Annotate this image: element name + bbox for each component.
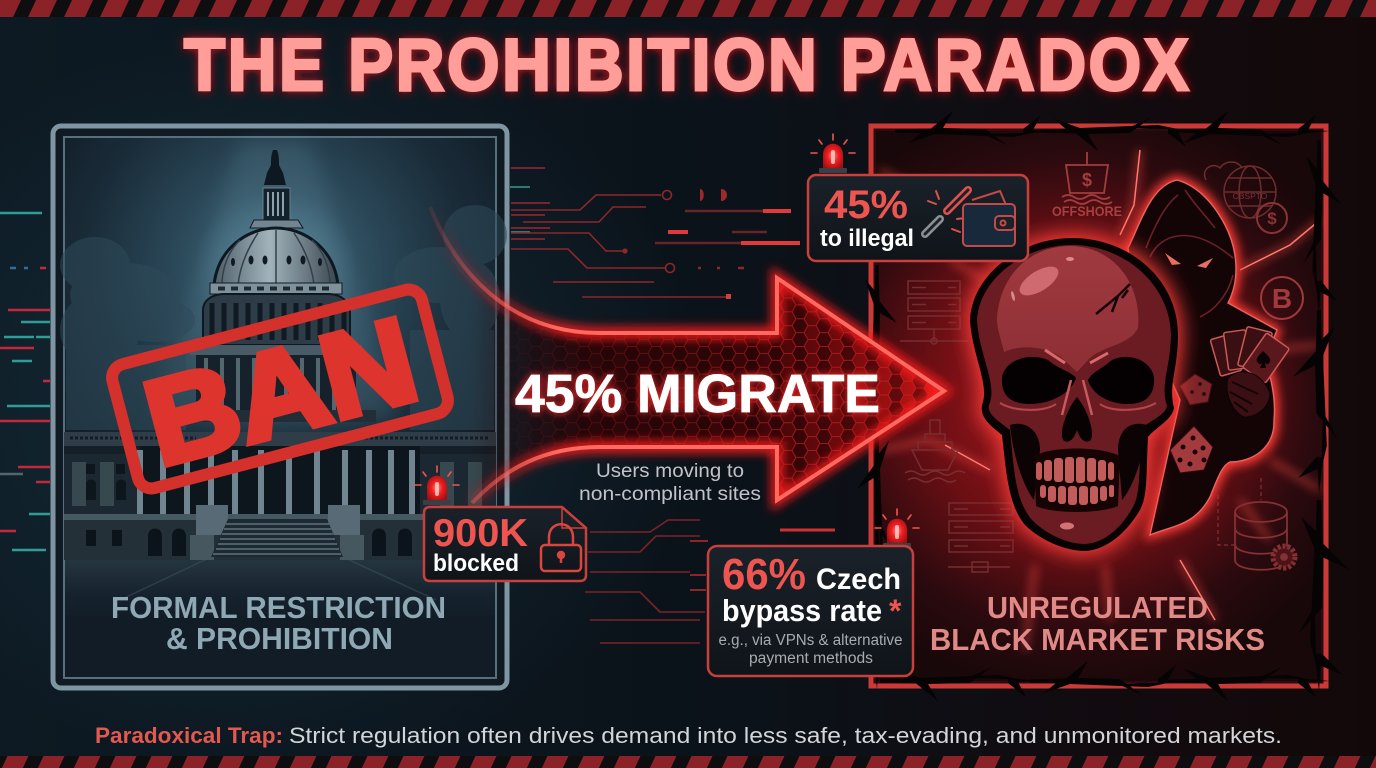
hand [1227, 372, 1270, 417]
icon: dice large [1170, 426, 1213, 473]
thorn vines [857, 111, 1349, 701]
BAN stamp: BAN [132, 293, 429, 491]
glowing cracks [880, 150, 1320, 650]
hazard stripe: top [0, 0, 1376, 17]
label: formal restriction: FORMAL RESTRICTION [111, 590, 446, 625]
panel: unregulated black market [857, 111, 1349, 701]
icon: offshore ship [1052, 152, 1122, 219]
nose [1062, 397, 1092, 442]
callout: 900K blocked [415, 466, 586, 581]
icon: dice small [1180, 374, 1212, 405]
capitol building [64, 150, 496, 620]
clouds: left [60, 237, 195, 430]
callout: 45% to illegal: 45% [824, 183, 908, 227]
panel: formal restriction [53, 126, 507, 688]
icon: cargo ship [905, 420, 965, 482]
icon: crypto globe [1205, 162, 1287, 233]
label: unregulated black market risks [930, 590, 1265, 657]
callout: 45% to illegal: to illegal [820, 225, 914, 252]
footer note: Strict regulation often drives demand into less safe, tax-evading, and unmonitored markets. [289, 723, 1282, 748]
icon: offshore ship: OFFSHORE [1052, 203, 1122, 219]
arrow label: 45% MIGRATE [515, 364, 880, 424]
label: unregulated black market risks: UNREGULATED [987, 590, 1208, 625]
skull [970, 238, 1178, 551]
hazard stripe: bottom [0, 756, 1376, 768]
icon: crypto globe: $ [1267, 209, 1277, 228]
clouds: right [394, 205, 507, 430]
panel frame: right [871, 126, 1326, 686]
title: THE PROHIBITION PARADOX [184, 24, 1189, 106]
callout: 900K blocked: blocked [433, 550, 519, 577]
arrow sublabel: Users moving to [596, 461, 744, 482]
eye sockets [1002, 357, 1076, 404]
callout: 45% to illegal [808, 134, 1028, 261]
icon: padlock [541, 524, 581, 571]
icon: wallet [963, 191, 1015, 246]
icon: database and gear [1218, 478, 1295, 570]
label: formal restriction: & PROHIBITION [166, 621, 393, 656]
circuit traces: upper [511, 189, 800, 299]
label: unregulated black market risks: BLACK MARKET RISKS [930, 622, 1265, 657]
arrow sublabel [579, 461, 761, 505]
icon: ledger rows [948, 503, 1013, 572]
icon: siren [415, 466, 459, 505]
arrow sublabel: non-compliant sites [579, 484, 761, 505]
callout: 66% Czech bypass rate: bypass rate [722, 593, 882, 628]
callout: 66% Czech bypass rate: payment methods [749, 650, 873, 667]
hooded figure [1126, 178, 1290, 537]
icon: bitcoin [1261, 277, 1303, 319]
icon: crypto globe: CBSPTO [1233, 191, 1268, 201]
icon: offshore ship: $ [1082, 170, 1092, 190]
label: formal restriction [111, 590, 446, 656]
glitch lines: left edge [0, 213, 50, 550]
panel frame: left [53, 126, 507, 688]
callout: 66% Czech bypass rate: Czech [816, 563, 901, 596]
footer note: Paradoxical Trap: [95, 723, 283, 748]
migration arrow [430, 207, 944, 505]
icon: bitcoin: B [1272, 283, 1292, 314]
icon: server rack upper [900, 281, 968, 344]
icon: siren [811, 134, 855, 173]
callout: 900K blocked: 900K [433, 512, 528, 555]
light beam behind dome [150, 140, 400, 420]
callout: 66% Czech bypass rate: e.g., via VPNs & alternative [718, 632, 902, 649]
icon: broken chain [925, 190, 968, 234]
circuit traces: lower [585, 520, 835, 643]
icon: playing cards [1210, 326, 1290, 383]
icon: siren [875, 509, 919, 548]
teeth [1034, 448, 1120, 512]
glitch lines: beside left panel [510, 168, 550, 239]
cheek hollows [1010, 424, 1147, 500]
callout: 66% Czech bypass rate: * [889, 593, 902, 629]
callout: 66% Czech bypass rate [708, 509, 919, 676]
callout: 66% Czech bypass rate: 66% [722, 550, 806, 599]
lit cranium [997, 246, 1138, 372]
